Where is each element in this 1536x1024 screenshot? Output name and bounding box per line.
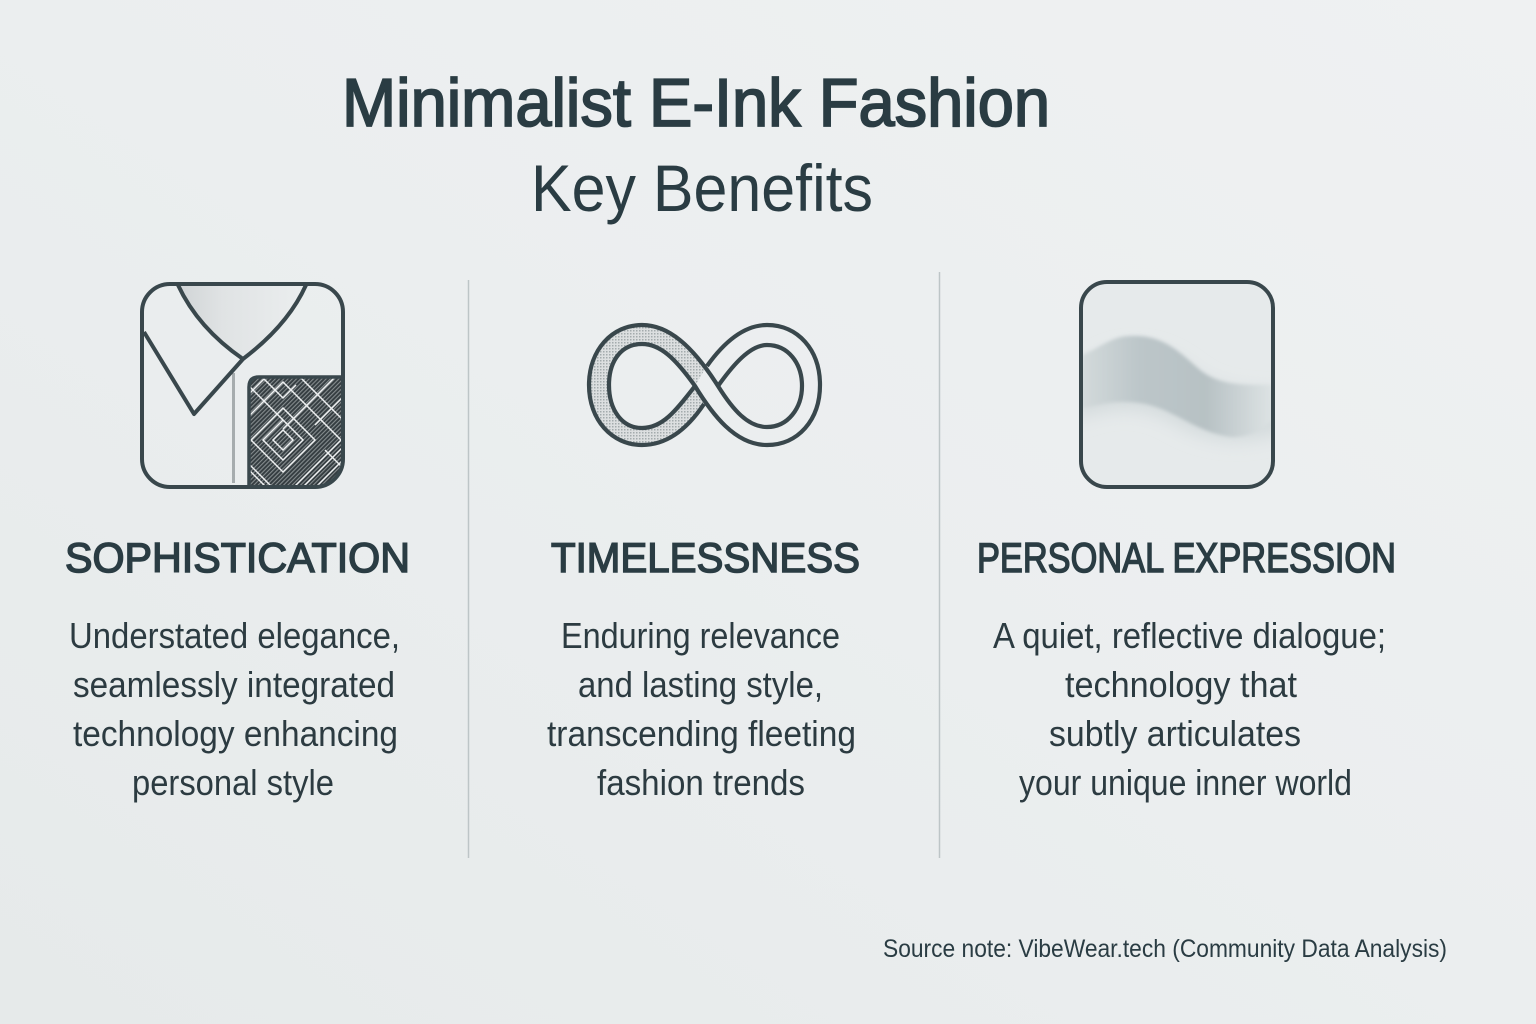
subtitle: Key Benefits [531,151,873,225]
description: personal expression: your unique inner world [1019,762,1352,803]
description: personal expression [993,615,1386,803]
heading: timelessness: TIMELESSNESS [551,534,860,581]
description: sophistication: seamlessly integrated [73,664,395,705]
icon: infinity ribbon [589,325,820,445]
source note: Source note: VibeWear.tech (Community Data Analysis) [883,935,1447,963]
heading: personal expression: PERSONAL EXPRESSION [977,534,1396,581]
icon: shirt collar and patterned pocket [140,282,345,489]
description: timelessness: fashion trends [597,762,805,803]
description: timelessness: and lasting style, [578,664,823,705]
description: sophistication: Understated elegance, [69,615,400,656]
description: sophistication: personal style [132,762,334,803]
panel: sophistication [65,284,410,803]
panel: personal expression [977,282,1396,803]
panel: timelessness [547,325,860,803]
description: personal expression: A quiet, reflective dialogue; [993,615,1386,656]
description: timelessness: Enduring relevance [561,615,840,656]
icon: framed grey wave [1075,282,1285,487]
description: sophistication: technology enhancing [73,713,398,754]
description: sophistication [69,615,400,803]
title: Minimalist E-Ink Fashion [342,65,1050,141]
description: timelessness: transcending fleeting [547,713,856,754]
description: timelessness [547,615,856,803]
heading: sophistication: SOPHISTICATION [65,534,410,581]
description: personal expression: technology that [1065,664,1297,705]
description: personal expression: subtly articulates [1049,713,1301,754]
